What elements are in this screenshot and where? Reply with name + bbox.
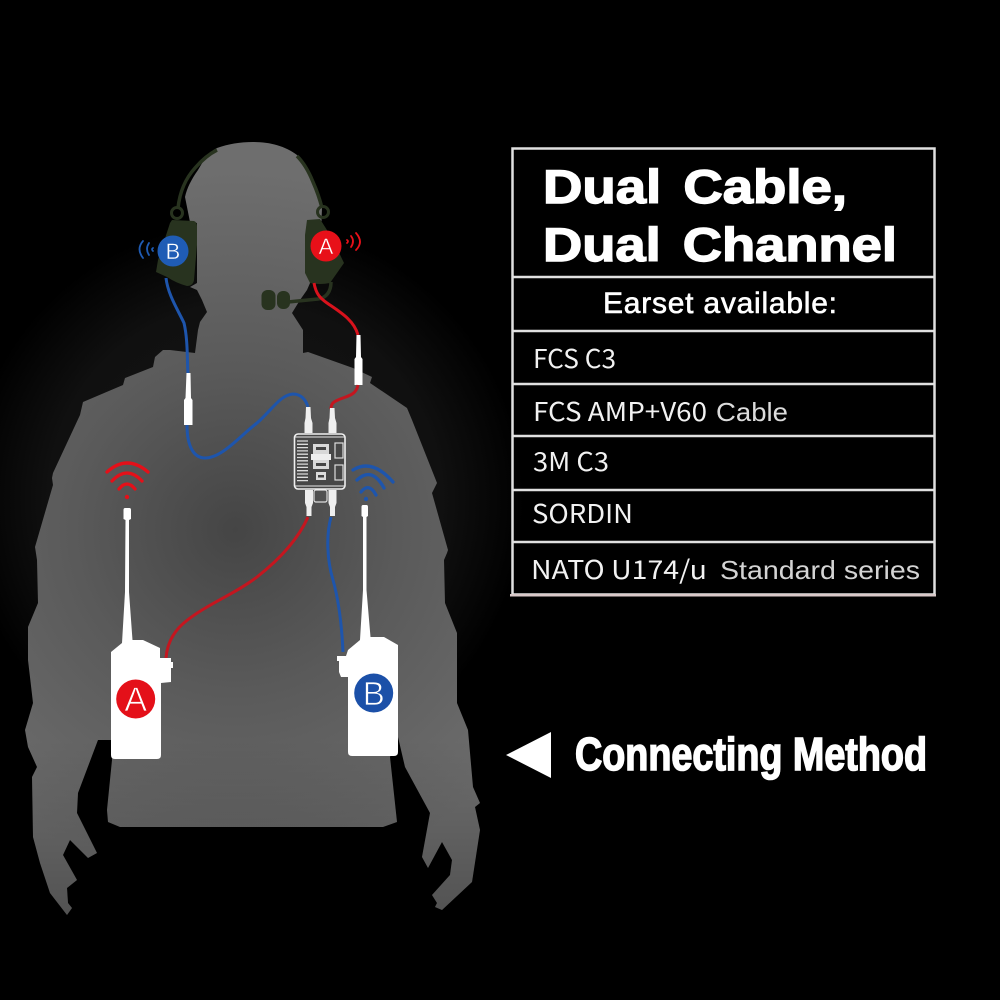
row: FCS AMP+V60 Cable: Cable [716,397,788,427]
row: SORDIN: SORDIN [532,494,633,531]
badge A on earcup: A [319,234,334,259]
label: connecting method: Connecting Method [575,728,927,780]
cable: red jack to adapter [331,385,358,409]
cable: red adapter to radio A [166,517,308,658]
radio A: A [124,681,147,719]
heading: dual channel: Dual Channel [543,218,897,271]
wifi icon: blue [353,466,393,501]
cable: blue adapter to radio B [328,517,343,652]
adapter box [294,407,345,516]
table: compatible earsets [510,148,936,596]
left inline jack [184,373,192,425]
sound waves: right [347,233,360,250]
row: FCS AMP+V60 Cable [533,392,788,429]
row: FCS AMP+V60 Cable: FCS AMP+V60 [533,392,707,429]
headset [156,150,344,310]
radio A [111,508,173,759]
wifi icon: red [107,463,148,499]
cable: red headset to jack [314,283,358,335]
row: NATO U174/u Standard series: Standard series [720,555,920,585]
cable: blue headset to jack [166,278,188,374]
arrow: points to figure [506,732,551,778]
badge A on earcup [310,230,342,262]
sound waves: left [140,241,153,258]
badge B on earcup [158,236,188,266]
row: FCS C3: FCS C3 [533,339,616,376]
cable: blue jack to adapter [187,394,308,458]
subheading: Earset available: [603,287,837,320]
radio B [337,505,398,756]
row: NATO U174/u Standard series [531,550,920,587]
heading: dual cable: Dual Cable, [543,160,847,213]
soldier silhouette [25,142,480,915]
row: NATO U174/u Standard series: NATO U174/u [531,550,707,587]
radio B: B [363,675,385,712]
right inline jack [354,335,362,385]
row: 3M C3: 3M C3 [533,442,609,479]
badge B on earcup: B [166,239,180,264]
